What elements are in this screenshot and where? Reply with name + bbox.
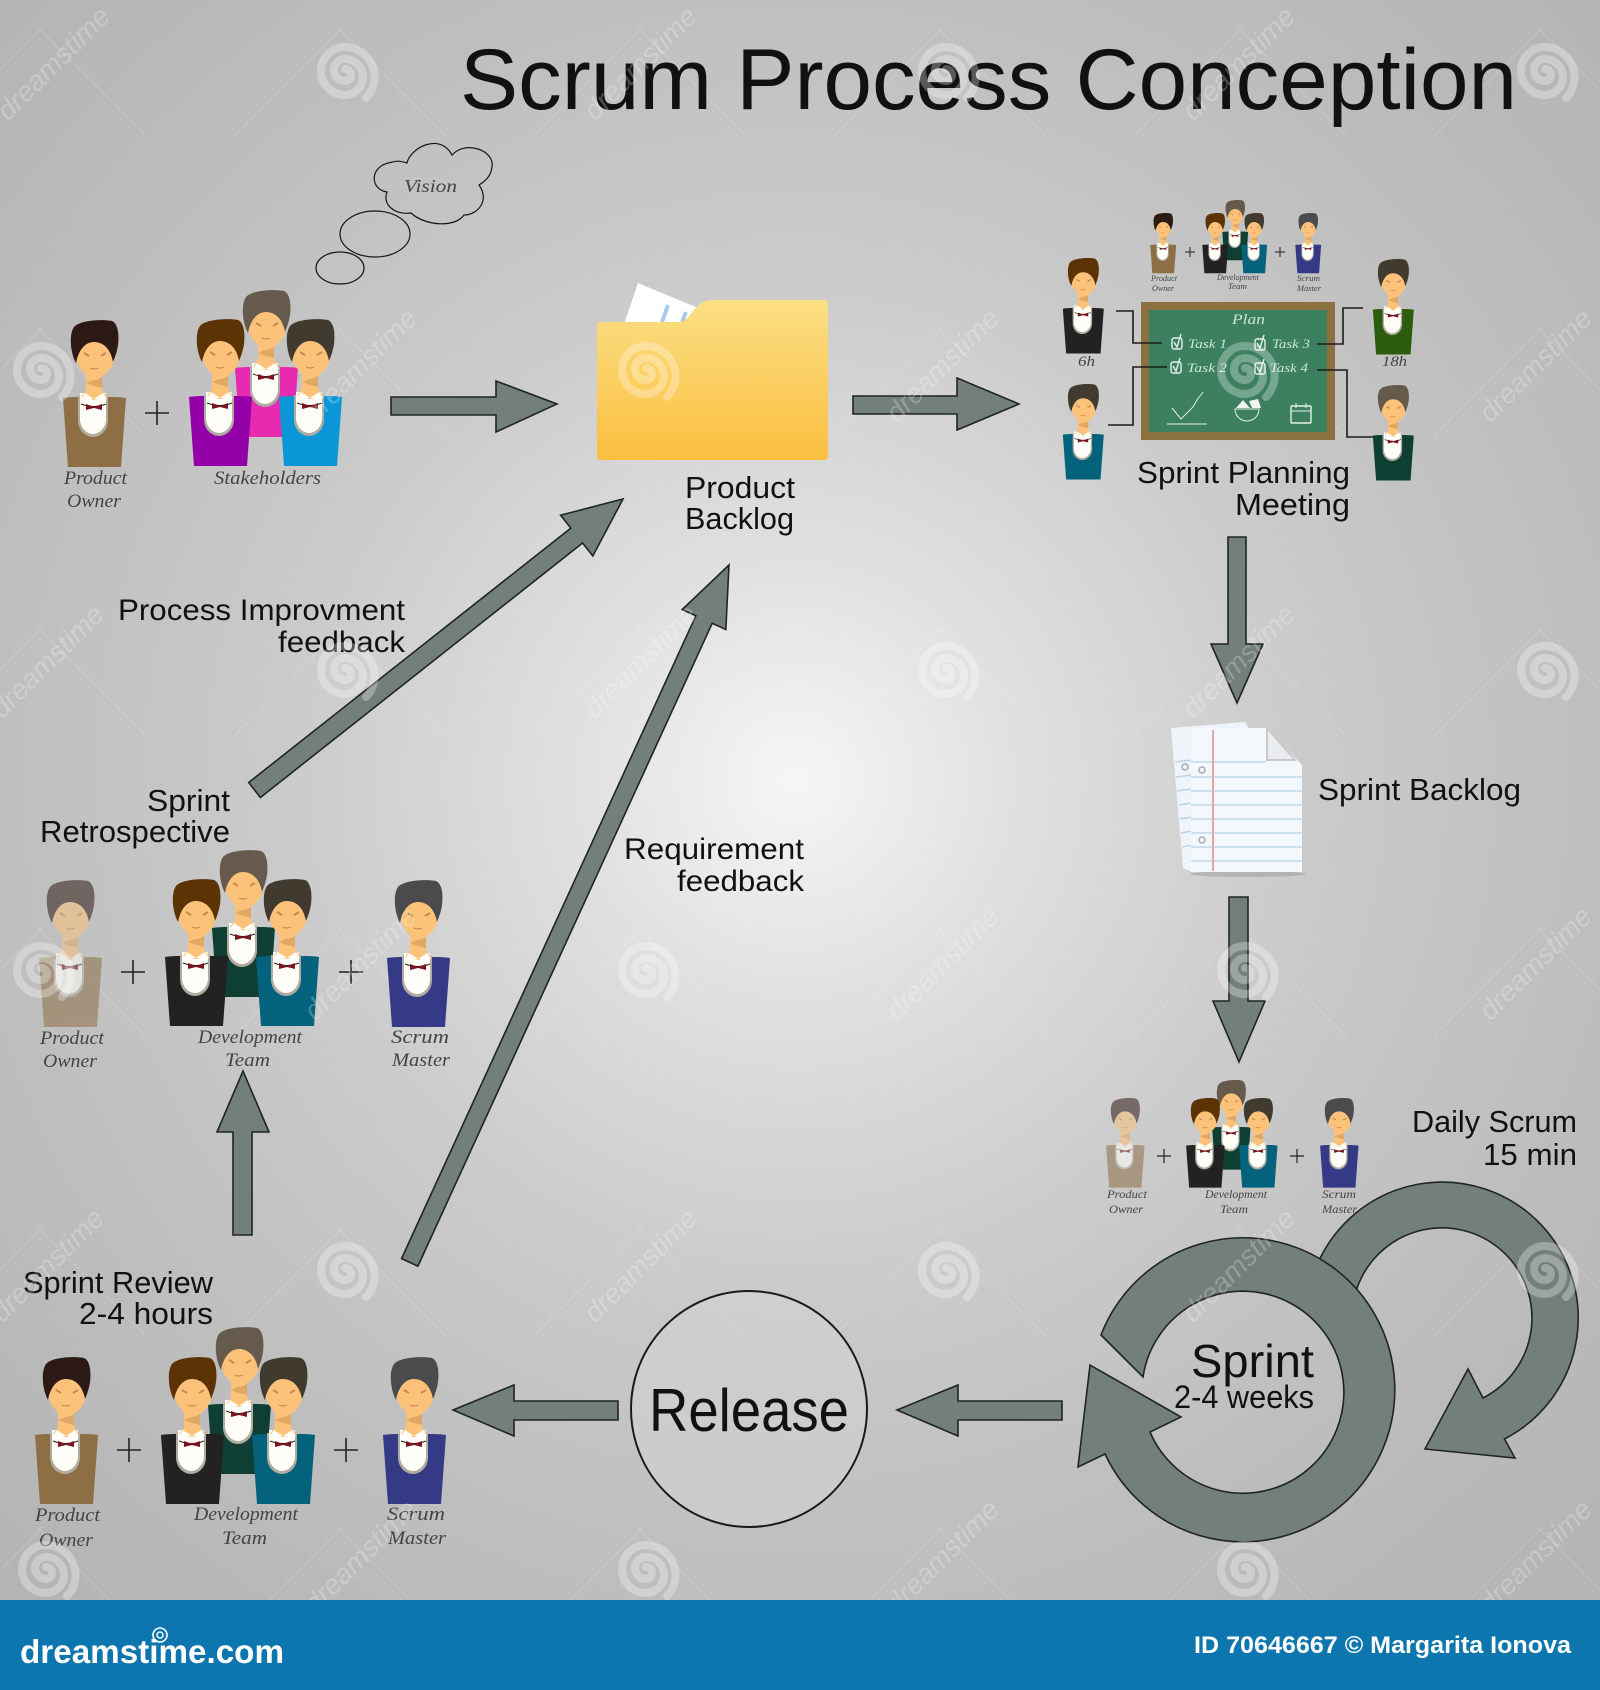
label: sprint planning meeting (1137, 455, 1350, 522)
labels: Team (222, 1528, 267, 1549)
labels: Development (1204, 1187, 1268, 1201)
labels: Scrum (387, 1504, 445, 1525)
icon: sprint backlog documents (1171, 722, 1306, 877)
label: sprint planning meeting: Sprint Planning (1137, 455, 1350, 490)
top row team: Scrum (1297, 274, 1320, 283)
label: product owner (63, 468, 128, 512)
person: product owner faded (39, 880, 102, 1027)
release circle (631, 1291, 867, 1527)
panel: sprint planning meeting (1063, 200, 1414, 522)
connector lines (1108, 308, 1373, 437)
plus signs (121, 960, 363, 984)
label: sprint retrospective: Sprint (147, 783, 230, 818)
person: product owner (63, 320, 126, 467)
label: product backlog (685, 470, 795, 536)
watermark spirals and text: dreamstime (1473, 303, 1598, 428)
labels: Team (1220, 1202, 1248, 1216)
labels: Scrum (1322, 1187, 1356, 1201)
watermark spirals and text: dreamstime (1176, 1, 1301, 126)
label: sprint retrospective (40, 783, 230, 849)
person: development team right (1239, 1098, 1278, 1188)
person: development team left (1186, 1098, 1225, 1188)
person: scrum master (1320, 1098, 1359, 1188)
person: stakeholder purple (189, 319, 252, 466)
plus signs (117, 1438, 358, 1462)
top row team: Owner (1152, 284, 1175, 293)
watermark spirals and text: dreamstime (578, 599, 703, 724)
arrow: sprint to release (897, 1385, 1062, 1436)
top row team (1150, 200, 1322, 293)
loop arrow: sprint (1078, 1238, 1395, 1542)
label: process improvement feedback (118, 594, 406, 659)
labels (39, 1027, 451, 1072)
watermark spirals and text: dreamstime (1176, 599, 1301, 724)
label: daily scrum: Daily Scrum (1412, 1104, 1577, 1139)
labels: Product (39, 1028, 105, 1049)
watermark spirals and text: dreamstime (1176, 1203, 1301, 1328)
person: stakeholder blue (279, 319, 342, 466)
person: 18h (1373, 259, 1414, 355)
watermark spirals and text: dreamstime (1473, 901, 1598, 1026)
top row team: Product (1150, 274, 1178, 283)
footer credit: ID 70646667 © Margarita Ionova (1194, 1632, 1572, 1659)
arrow: planning to sprint backlog (1211, 537, 1263, 703)
label: requirement feedback: Requirement (624, 833, 805, 866)
label: sprint review: Sprint Review (23, 1265, 214, 1300)
person: development team right (252, 1357, 315, 1504)
arrow: sprint backlog to daily scrum (1213, 897, 1265, 1062)
top row team: Team (1228, 282, 1247, 291)
vision thought bubble: Vision (404, 176, 457, 196)
arrow: review to retrospective (217, 1071, 269, 1235)
labels: Product (34, 1505, 101, 1526)
footer bar (0, 1600, 1600, 1690)
chalkboard: Task 4 (1270, 360, 1309, 375)
labels: Team (225, 1050, 270, 1071)
label: requirement feedback: feedback (677, 865, 805, 898)
label: requirement feedback (624, 833, 805, 898)
top row team: Development (1216, 273, 1260, 282)
label: sprint duration: 2-4 weeks (1174, 1379, 1314, 1415)
labels: Owner (1109, 1202, 1143, 1216)
group: product owner and stakeholders (63, 290, 342, 512)
label: product backlog: Product (685, 470, 795, 505)
chalkboard: Task 2 (1187, 360, 1228, 375)
group: sprint review team (34, 1327, 447, 1551)
watermark spirals and text: dreamstime (578, 1203, 703, 1328)
arrow: process improvement feedback (238, 479, 639, 810)
labels: Owner (39, 1530, 94, 1551)
label: 6h: 6h (1078, 354, 1095, 370)
arrow: stakeholders to backlog (391, 381, 557, 432)
vision thought bubble (316, 143, 492, 284)
labels: Development (197, 1027, 303, 1048)
person: development team left (165, 879, 228, 1026)
person: product owner (35, 1357, 98, 1504)
title: Scrum Process Conception (460, 32, 1517, 128)
footer logo text: dreamstime.com (20, 1633, 284, 1670)
group: daily scrum team (1106, 1080, 1359, 1216)
label: stakeholders: Stakeholders (214, 468, 321, 489)
labels (1106, 1187, 1357, 1216)
labels: Owner (43, 1051, 98, 1072)
person: scrum master (387, 880, 450, 1027)
watermark spirals and text: dreamstime (880, 901, 1005, 1026)
label: sprint review: 2-4 hours (79, 1296, 213, 1331)
labels: Development (193, 1504, 299, 1525)
watermark spirals and text: dreamstime (578, 1, 703, 126)
labels: Master (387, 1528, 447, 1549)
chalkboard: Plan (1231, 312, 1265, 328)
label: process improvement feedback: Process Improvment (118, 594, 406, 627)
plus sign (145, 401, 169, 425)
label: sprint review (23, 1265, 214, 1331)
icon: product backlog folder (597, 283, 828, 460)
watermark spirals and text: dreamstime (1473, 1494, 1598, 1619)
person: development team back (212, 850, 275, 997)
person: development team back (1212, 1080, 1251, 1170)
label: product backlog: Backlog (685, 501, 794, 536)
labels: Master (391, 1050, 451, 1071)
arrow: requirement feedback (388, 555, 751, 1272)
label: sprint retrospective: Retrospective (40, 814, 230, 849)
person: development team right (256, 879, 319, 1026)
release circle: Release (649, 1377, 849, 1444)
label: sprint planning meeting: Meeting (1235, 487, 1350, 522)
label: sprint duration: Sprint (1191, 1335, 1314, 1387)
watermark spirals and text: dreamstime (880, 303, 1005, 428)
person: teal (1063, 384, 1104, 480)
plus signs (1157, 1149, 1304, 1163)
watermark spirals and text: dreamstime (298, 1494, 423, 1619)
arrow: backlog to sprint planning (853, 378, 1019, 430)
loop arrow: daily scrum (1319, 1182, 1578, 1458)
watermark spirals and text: dreamstime (880, 1494, 1005, 1619)
footer logo spiral (153, 1628, 167, 1642)
person: product owner faded (1106, 1098, 1145, 1188)
person: development team back (208, 1327, 271, 1474)
arrow: release to sprint review (453, 1385, 618, 1436)
labels: Master (1321, 1202, 1357, 1216)
label: daily scrum: 15 min (1483, 1137, 1577, 1172)
label: product owner: Owner (67, 491, 122, 512)
label: process improvement feedback: feedback (278, 626, 406, 659)
chalkboard: Task 1 (1188, 336, 1227, 351)
person: stakeholder pink (235, 290, 298, 437)
watermark spirals and text: dreamstime (298, 303, 423, 428)
chalkboard: Task 3 (1272, 336, 1311, 351)
person: 6h (1063, 258, 1104, 354)
watermark spirals and text: dreamstime (298, 901, 423, 1026)
label: 18h: 18h (1382, 354, 1407, 370)
labels (34, 1504, 447, 1551)
labels: Scrum (391, 1027, 449, 1048)
label: daily scrum (1412, 1104, 1577, 1172)
person: dark green (1373, 385, 1414, 481)
labels: Product (1106, 1187, 1148, 1201)
chalkboard (1141, 302, 1335, 440)
person: development team left (161, 1357, 224, 1504)
top row team: Master (1296, 284, 1322, 293)
label: product owner: Product (63, 468, 128, 489)
group: sprint retrospective team (39, 850, 451, 1072)
person: scrum master (383, 1357, 446, 1504)
label: sprint backlog: Sprint Backlog (1318, 772, 1521, 807)
label: sprint duration (1174, 1335, 1314, 1415)
